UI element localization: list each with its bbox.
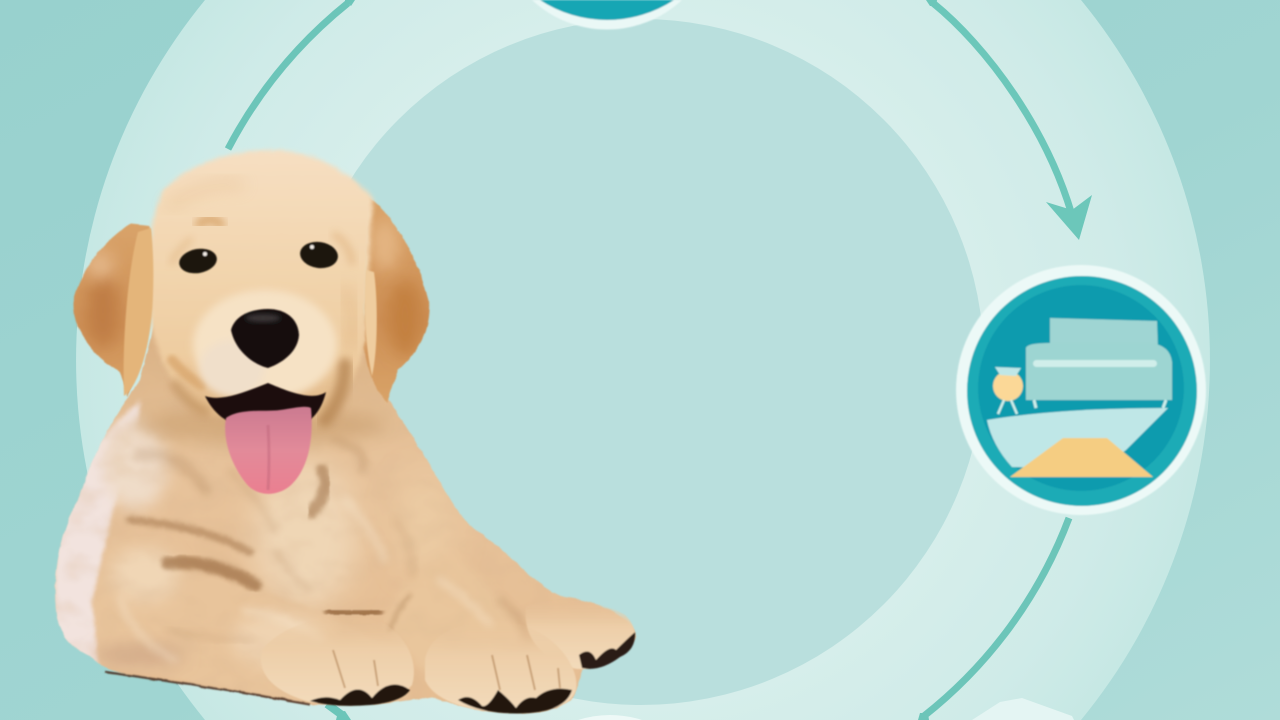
chin shadow — [135, 407, 385, 443]
chest light fur — [253, 460, 357, 610]
floor — [987, 408, 1168, 470]
puppy torso — [55, 300, 636, 713]
fur shadows — [130, 440, 528, 640]
icon: bottom right badge peek — [972, 698, 1074, 720]
neck pale fur — [103, 420, 167, 510]
puppy head — [148, 150, 373, 418]
puppy back paw — [526, 600, 635, 669]
puppy ear strip left — [124, 228, 153, 396]
puppy — [50, 150, 640, 715]
arrow: upper left arc — [228, 0, 355, 149]
puppy nose — [231, 309, 299, 368]
arrow: upper right arc with head — [926, 0, 1092, 240]
puppy right front paw — [425, 620, 577, 713]
icon: bottom centre badge peek — [578, 715, 642, 720]
puppy tongue — [225, 407, 312, 494]
arrow: lower left arc — [327, 704, 351, 720]
rug — [1010, 438, 1153, 477]
left foreleg — [90, 583, 275, 692]
sofa highlight — [1033, 360, 1157, 367]
icon: sofa badge — [956, 265, 1206, 515]
sofa seat — [1026, 343, 1172, 400]
puppy body and limbs — [50, 300, 640, 715]
sofa legs — [1034, 400, 1166, 408]
sofa back — [1050, 318, 1158, 350]
badge rim — [956, 265, 1206, 515]
pale flank — [50, 400, 140, 670]
fur texture — [56, 420, 162, 645]
fur highlights — [120, 500, 490, 660]
puppy face shading — [170, 184, 353, 420]
puppy eyes — [177, 239, 340, 276]
puppy underside shadow — [105, 672, 310, 704]
arrow: lower right arc — [918, 518, 1069, 720]
right foreleg — [385, 555, 525, 680]
icon: top step badge — [532, 0, 682, 30]
inner circle panel — [298, 19, 984, 705]
puppy ear strip right — [365, 270, 377, 376]
puppy right ear — [364, 197, 429, 403]
puppy left ear — [73, 224, 152, 397]
badge disc — [967, 276, 1197, 506]
puppy mouth — [205, 383, 326, 424]
lamp — [993, 367, 1023, 414]
puppy muzzle — [193, 290, 337, 400]
puppy left front paw — [261, 616, 414, 706]
